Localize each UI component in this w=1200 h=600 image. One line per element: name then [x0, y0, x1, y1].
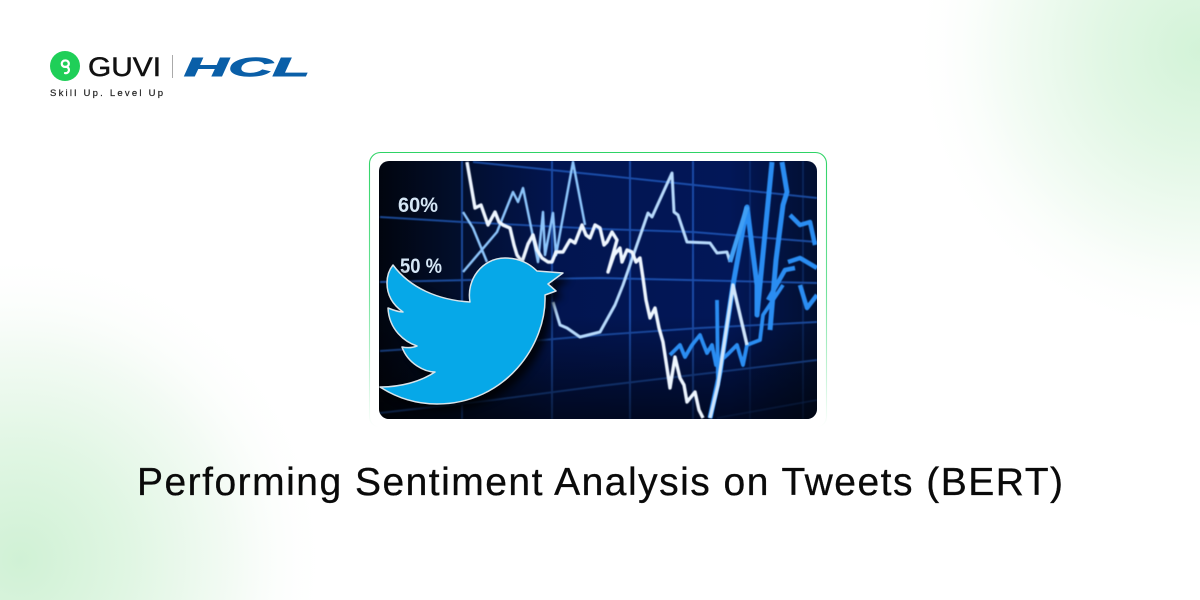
grid lines — [380, 161, 817, 419]
blue-white lower line — [710, 285, 747, 418]
HCL wordmark: HCL — [184, 52, 310, 82]
chart image: stock lines with Twitter bird — [379, 161, 817, 419]
icon: Twitter bird — [380, 258, 563, 404]
chart background — [379, 161, 817, 419]
image frame — [370, 152, 826, 428]
logo: GUVI and HCL — [50, 51, 310, 99]
background glow: bottom left — [0, 245, 335, 600]
divider — [172, 55, 173, 78]
chart labels: 60% — [398, 194, 438, 217]
icon: bird shadow — [387, 264, 570, 410]
title: Performing Sentiment Analysis on Tweets (BERT) — [137, 461, 1063, 504]
light blue data lines — [463, 162, 747, 337]
icon: GUVI green circle — [50, 51, 80, 81]
image bottom vignette — [379, 325, 817, 419]
tagline: Skill Up. Level Up — [50, 88, 163, 99]
GUVI wordmark: GUVI — [88, 52, 161, 82]
chart image: stock lines with Twitter bird: 50 % — [400, 255, 442, 278]
blue data lines — [670, 162, 817, 418]
background glow: top right — [900, 0, 1200, 345]
white data line — [467, 162, 703, 418]
